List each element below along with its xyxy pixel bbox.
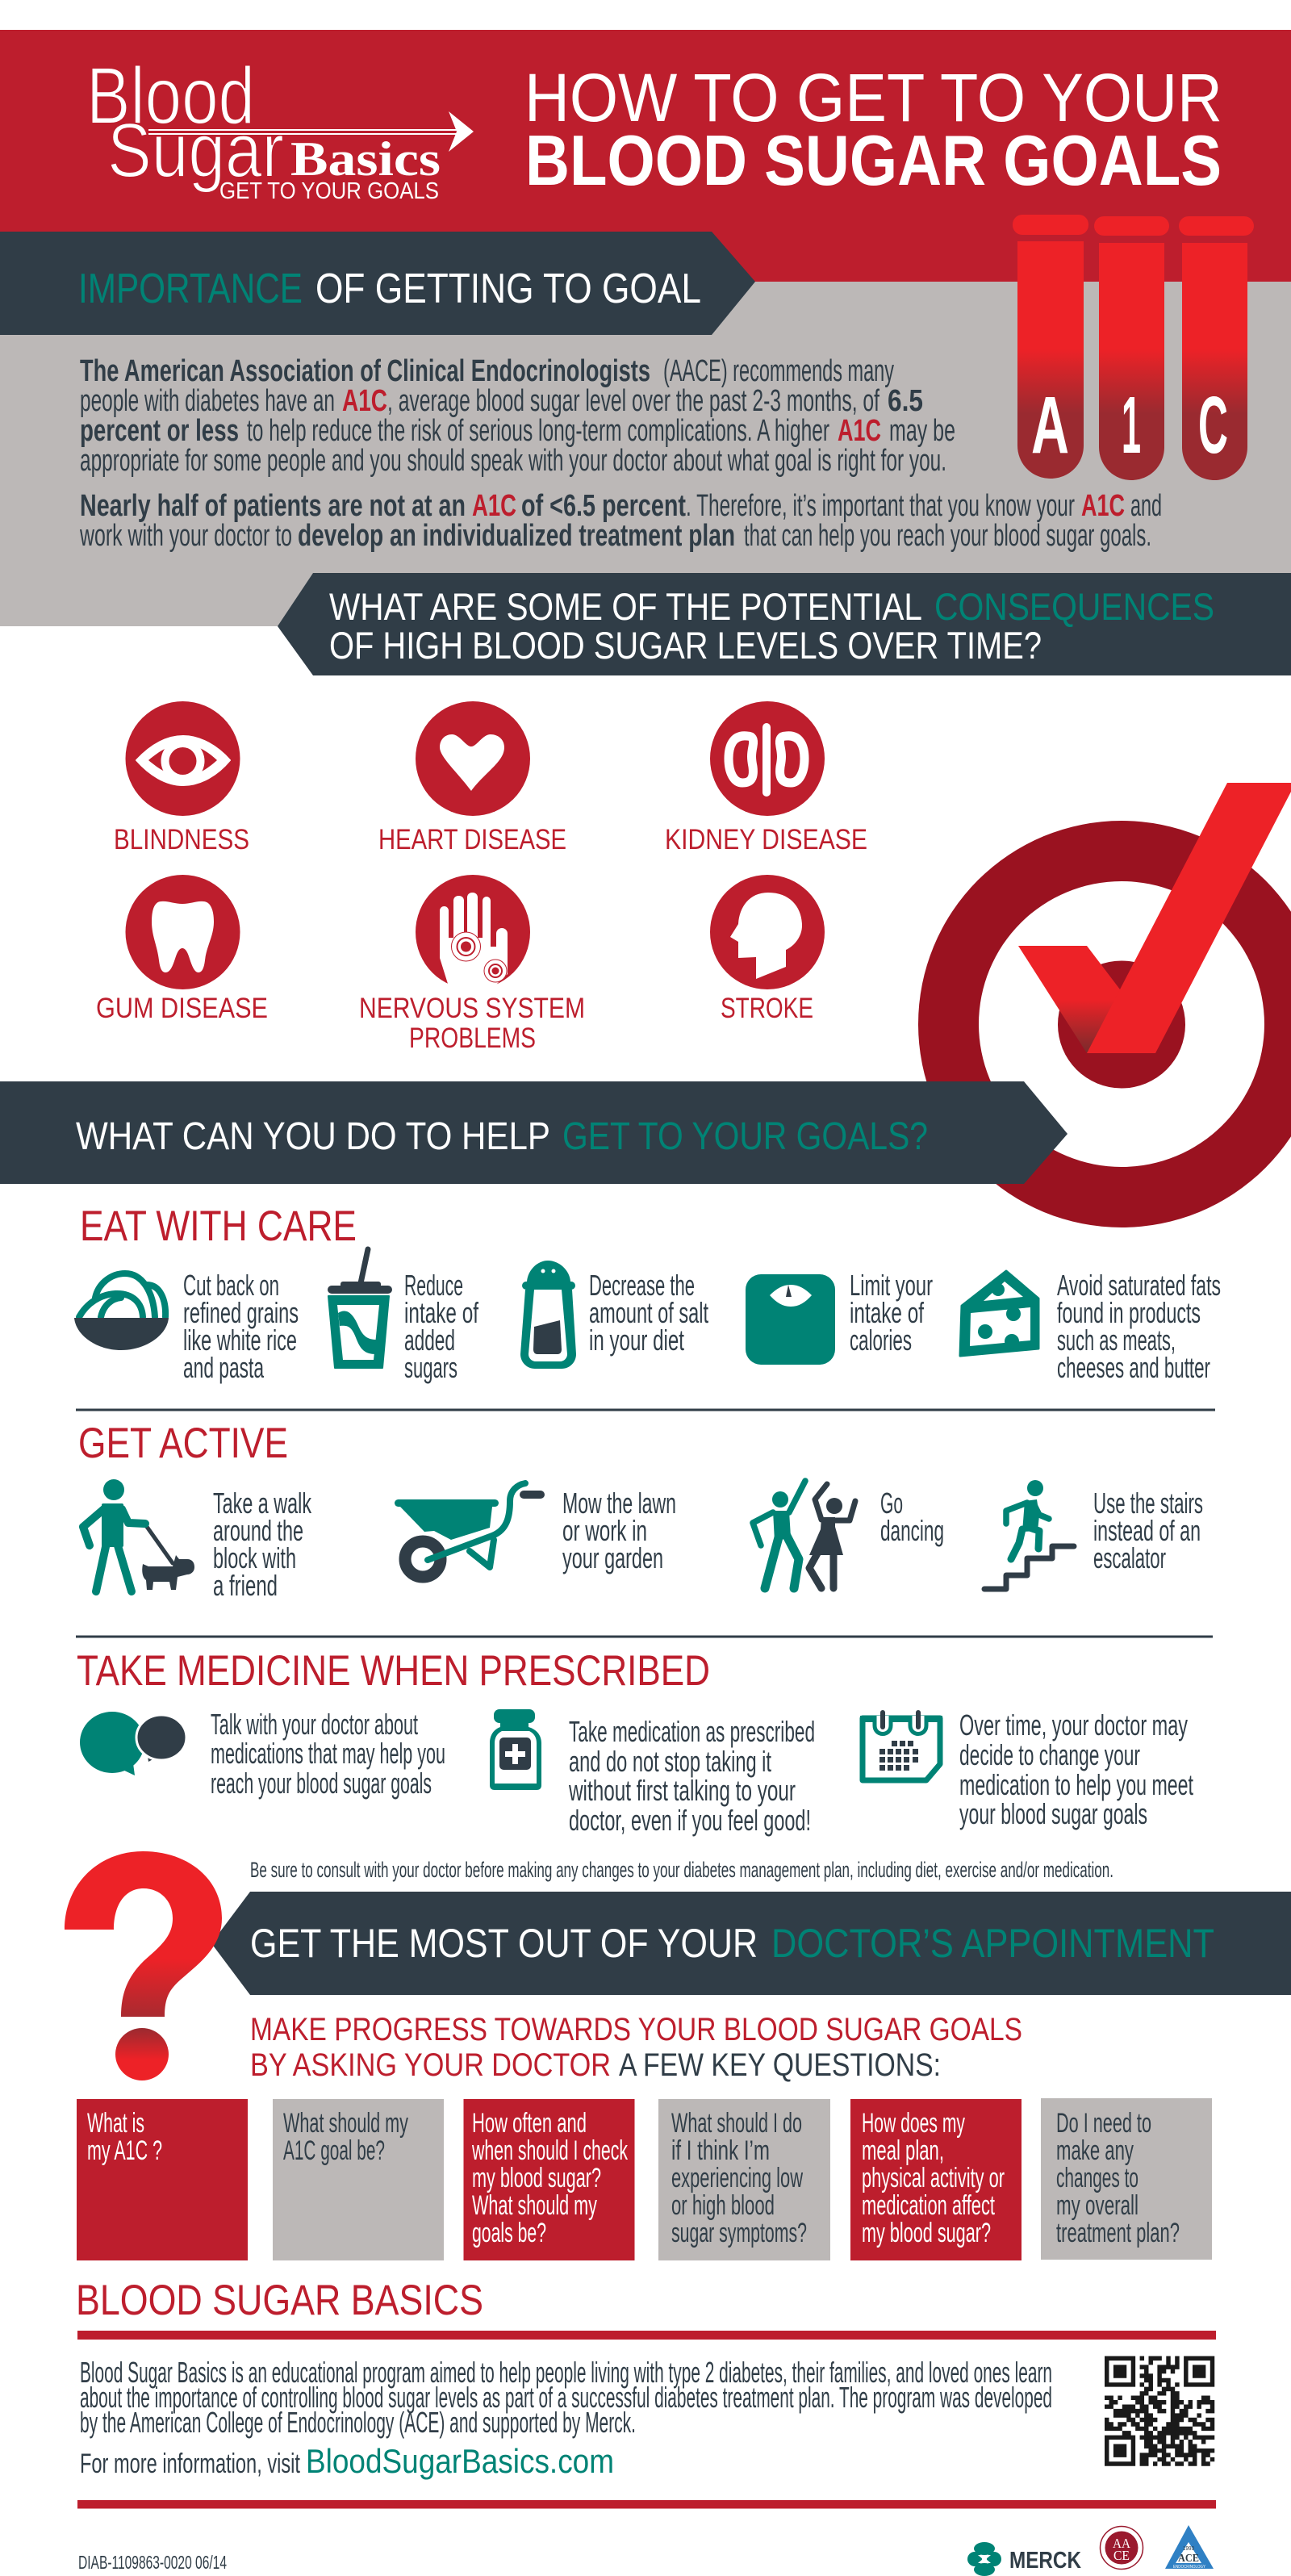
- icon: A1C blood tubes: A: [1031, 380, 1069, 470]
- logo: Merck: [967, 2542, 1081, 2576]
- banner: importance of getting to goal: [0, 232, 755, 335]
- text block: AACE recommendation: , average blood sugar level over the past 2-3 months, of: [387, 384, 879, 418]
- question box 5: physical activity or: [862, 2163, 1005, 2193]
- tip: salt: Decrease the: [589, 1269, 695, 1302]
- question box 3: my blood sugar?: [472, 2163, 601, 2193]
- tip: saturated fats: [960, 1269, 1221, 1384]
- question box 4: if I think I’m: [671, 2135, 770, 2166]
- logo: AACE seal: [1101, 2526, 1143, 2570]
- tip: use the stairs: [984, 1480, 1203, 1589]
- question box 4: or high blood: [671, 2190, 775, 2221]
- tip: refined grains: and pasta: [183, 1351, 265, 1384]
- text block: nearly half of patients: A1C: [1081, 489, 1125, 523]
- logo: Blood Sugar Basics: Sugar: [107, 107, 284, 194]
- question box 2: A1C goal be?: [283, 2135, 385, 2166]
- tip: salt: amount of salt: [589, 1296, 708, 1329]
- heading: blood sugar basics: BLOOD SUGAR BASICS: [76, 2277, 483, 2324]
- question box 3: goals be?: [472, 2218, 546, 2248]
- tip: go dancing: [753, 1481, 944, 1588]
- tip: take medication as prescribed: [490, 1709, 815, 1837]
- title: [524, 60, 1222, 200]
- consequence: stroke: [710, 875, 825, 1024]
- website line: BloodSugarBasics.com: [306, 2442, 614, 2480]
- text block: AACE recommendation: people with diabetes have an: [80, 384, 335, 418]
- logo: Blood Sugar Basics: Basics: [290, 132, 441, 186]
- text block: AACE recommendation: [80, 354, 955, 478]
- text block: AACE recommendation: A1C: [342, 384, 387, 418]
- website line: For more information, visit: [80, 2448, 300, 2479]
- logo: Blood Sugar Basics: GET TO YOUR GOALS: [219, 178, 439, 204]
- document code: DIAB-1109863-0020 06/14: [78, 2552, 227, 2573]
- heading: take medicine when prescribed: TAKE MEDICINE WHEN PRESCRIBED: [77, 1647, 710, 1695]
- text block: nearly half of patients: and: [1130, 489, 1162, 523]
- banner: potential consequences: CONSEQUENCES: [934, 585, 1214, 628]
- title: HOW TO GET TO YOUR: [524, 60, 1222, 136]
- question box 6: my overall: [1056, 2190, 1139, 2221]
- subheading: make progress: BY ASKING YOUR DOCTOR: [250, 2047, 611, 2083]
- question box 4: [658, 2099, 830, 2260]
- tip: refined grains: refined grains: [183, 1296, 299, 1329]
- text block: program description: by the American College of Endocrinology (ACE) and supported by Merck.: [80, 2406, 636, 2439]
- consequence: gum disease: [96, 875, 268, 1024]
- tip: take a walk: [83, 1479, 312, 1602]
- question box 3: when should I check: [471, 2135, 629, 2166]
- banner: what can you do: [0, 1081, 1067, 1184]
- question box 5: meal plan,: [862, 2135, 944, 2166]
- tip: change medication over time: your blood sugar goals: [959, 1797, 1147, 1830]
- icon: A1C blood tubes: 1: [1122, 380, 1141, 470]
- tip: refined grains: Cut back on: [183, 1269, 279, 1302]
- text block: nearly half of patients: of <6.5 percent: [521, 489, 686, 523]
- banner: doctor's appointment: GET THE MOST OUT OF YOUR: [250, 1921, 758, 1966]
- text block: nearly half of patients: Nearly half of patients are not at an: [80, 489, 466, 523]
- tip: salt: [520, 1261, 708, 1369]
- text block: AACE recommendation: (AACE) recommends many: [663, 354, 894, 388]
- question box 5: medication affect: [862, 2190, 995, 2221]
- question box 1: [77, 2099, 248, 2260]
- consequence: kidney disease: [665, 701, 867, 855]
- header band: [0, 30, 1291, 282]
- tip: use the stairs: Use the stairs: [1093, 1487, 1203, 1520]
- banner: doctor's appointment: [211, 1892, 1291, 1995]
- question box 3: What should my: [472, 2190, 597, 2221]
- question box 6: [1041, 2098, 1212, 2260]
- consequence: heart disease: [378, 701, 566, 855]
- tip: take a walk: block with: [213, 1541, 296, 1574]
- logo: AACE seal: CE: [1113, 2548, 1130, 2563]
- text block: AACE recommendation: The American Association of Clinical Endocrinologists: [80, 354, 650, 388]
- tip: garden: your garden: [562, 1541, 663, 1574]
- logo: AACE seal: AA: [1113, 2536, 1131, 2551]
- text block: AACE recommendation: 6.5: [888, 384, 923, 418]
- tip: take medication as prescribed: Take medication as prescribed: [569, 1715, 815, 1748]
- banner: what can you do: WHAT CAN YOU DO TO HELP: [76, 1115, 550, 1158]
- logo: Blood Sugar Basics: [86, 51, 474, 204]
- website line: [80, 2442, 614, 2480]
- banner: importance of getting to goal: OF GETTING TO GOAL: [315, 266, 701, 312]
- tip: take a walk: Take a walk: [213, 1487, 312, 1520]
- logo: ACE triangle: 1993: [1183, 2546, 1194, 2552]
- text block: AACE recommendation: to help reduce the risk of serious long-term complications. A higher: [247, 414, 829, 448]
- banner: what can you do: GET TO YOUR GOALS?: [562, 1115, 928, 1158]
- consequence: gum disease: GUM DISEASE: [96, 993, 268, 1024]
- question box 2: [273, 2099, 444, 2260]
- logo: ACE triangle: ENDOCRINOLOGY: [1173, 2565, 1206, 2570]
- consequence: blindness: BLINDNESS: [114, 824, 249, 855]
- grey importance panel: [0, 282, 1291, 626]
- tip: calories: Limit your: [850, 1269, 933, 1302]
- consequence: nervous system problems: PROBLEMS: [409, 1022, 536, 1054]
- tip: saturated fats: found in products: [1057, 1296, 1201, 1329]
- banner: potential consequences: [278, 573, 1291, 675]
- tip: take medication as prescribed: without first talking to your: [568, 1774, 796, 1807]
- text block: AACE recommendation: may be: [889, 414, 955, 448]
- tip: refined grains: like white rice: [183, 1324, 297, 1357]
- banner: importance of getting to goal: IMPORTANCE: [78, 266, 303, 312]
- text block: nearly half of patients: A1C: [472, 489, 516, 523]
- question box 3: How often and: [472, 2108, 587, 2139]
- tip: garden: or work in: [562, 1514, 647, 1547]
- consequence: kidney disease: KIDNEY DISEASE: [665, 824, 867, 855]
- tip: talk with your doctor: medications that may help you: [211, 1737, 445, 1770]
- banner: potential consequences: WHAT ARE SOME OF THE POTENTIAL: [329, 585, 922, 628]
- question box 5: [850, 2099, 1022, 2260]
- icon: A1C blood tubes: [1013, 215, 1254, 480]
- tip: refined grains: [74, 1269, 299, 1384]
- tip: change medication over time: decide to change your: [959, 1738, 1140, 1771]
- consequence: stroke: STROKE: [721, 993, 813, 1024]
- question box 6: make any: [1056, 2135, 1134, 2166]
- tip: take medication as prescribed: and do not stop taking it: [569, 1745, 771, 1778]
- subheading: make progress: MAKE PROGRESS TOWARDS YOUR BLOOD SUGAR GOALS: [250, 2012, 1022, 2047]
- question box 6: changes to: [1056, 2163, 1139, 2193]
- tip: change medication over time: [860, 1708, 1193, 1830]
- QR code: [1105, 2358, 1214, 2464]
- heading: eat with care: EAT WITH CARE: [80, 1202, 357, 1250]
- logo: ACE triangle: ACE: [1178, 2553, 1199, 2565]
- tip: take a walk: around the: [213, 1514, 303, 1547]
- question box 5: How does my: [862, 2108, 965, 2139]
- tip: added sugars: Reduce: [404, 1269, 463, 1302]
- question box 3: [463, 2099, 634, 2260]
- banner: potential consequences: OF HIGH BLOOD SUGAR LEVELS OVER TIME?: [329, 624, 1042, 667]
- tip: saturated fats: such as meats,: [1057, 1324, 1176, 1357]
- consequence: heart disease: HEART DISEASE: [378, 824, 566, 855]
- logo: Merck: MERCK: [1009, 2548, 1081, 2574]
- tip: calories: intake of: [850, 1296, 925, 1329]
- icon: A1C blood tubes: C: [1198, 380, 1228, 470]
- tip: added sugars: intake of: [404, 1296, 479, 1329]
- tip: salt: in your diet: [589, 1324, 684, 1357]
- icon: target with check mark: [918, 783, 1291, 1227]
- tip: garden: [395, 1483, 676, 1577]
- tip: use the stairs: instead of an: [1093, 1514, 1201, 1547]
- heading: get active: GET ACTIVE: [78, 1420, 288, 1467]
- question box 6: Do I need to: [1056, 2108, 1151, 2139]
- subheading: make progress: A FEW KEY QUESTIONS:: [619, 2047, 941, 2083]
- icon: question mark: [65, 1851, 222, 2080]
- tip: talk with your doctor: reach your blood sugar goals: [211, 1767, 432, 1800]
- consequence: blindness: [114, 701, 249, 855]
- tip: talk with your doctor: Talk with your doctor about: [211, 1708, 418, 1741]
- question box 1: What is: [87, 2108, 144, 2139]
- text block: program description: [80, 2356, 1052, 2439]
- question box 4: experiencing low: [671, 2163, 803, 2193]
- text block: AACE recommendation: A1C: [838, 414, 881, 448]
- tip: go dancing: dancing: [880, 1514, 944, 1547]
- text block: nearly half of patients: [79, 489, 1162, 553]
- tip: take medication as prescribed: doctor, even if you feel good!: [569, 1804, 811, 1837]
- tip: added sugars: added: [404, 1324, 455, 1357]
- logo: Blood Sugar Basics: Blood: [86, 51, 255, 141]
- tip: calories: calories: [850, 1324, 912, 1357]
- tip: added sugars: [328, 1249, 479, 1384]
- question box 6: treatment plan?: [1056, 2218, 1180, 2248]
- text block: nearly half of patients: . Therefore, it’s important that you know your: [686, 489, 1075, 523]
- question box 4: What should I do: [671, 2108, 802, 2139]
- tip: take a walk: a friend: [213, 1569, 278, 1602]
- tip: go dancing: Go: [880, 1487, 903, 1520]
- consequence: nervous system problems: [359, 875, 585, 1054]
- logo: ACE triangle: [1165, 2525, 1214, 2570]
- text block: AACE recommendation: percent or less: [80, 414, 239, 448]
- tip: garden: Mow the lawn: [562, 1487, 676, 1520]
- question box 2: What should my: [283, 2108, 408, 2139]
- banner: doctor's appointment: DOCTOR’S APPOINTMENT: [771, 1921, 1214, 1966]
- subheading: make progress: [250, 2012, 1022, 2083]
- text block: nearly half of patients: develop an individualized treatment plan: [298, 519, 735, 553]
- consequence: nervous system problems: NERVOUS SYSTEM: [359, 993, 585, 1024]
- tip: use the stairs: escalator: [1093, 1541, 1166, 1574]
- question box 1: my A1C ?: [87, 2135, 162, 2166]
- tip: added sugars: sugars: [404, 1351, 457, 1384]
- text block: nearly half of patients: work with your doctor to: [79, 519, 292, 553]
- question box 4: sugar symptoms?: [671, 2218, 807, 2248]
- tip: talk with your doctor: [80, 1708, 445, 1800]
- tip: calories: [746, 1269, 933, 1365]
- question box 5: my blood sugar?: [862, 2218, 991, 2248]
